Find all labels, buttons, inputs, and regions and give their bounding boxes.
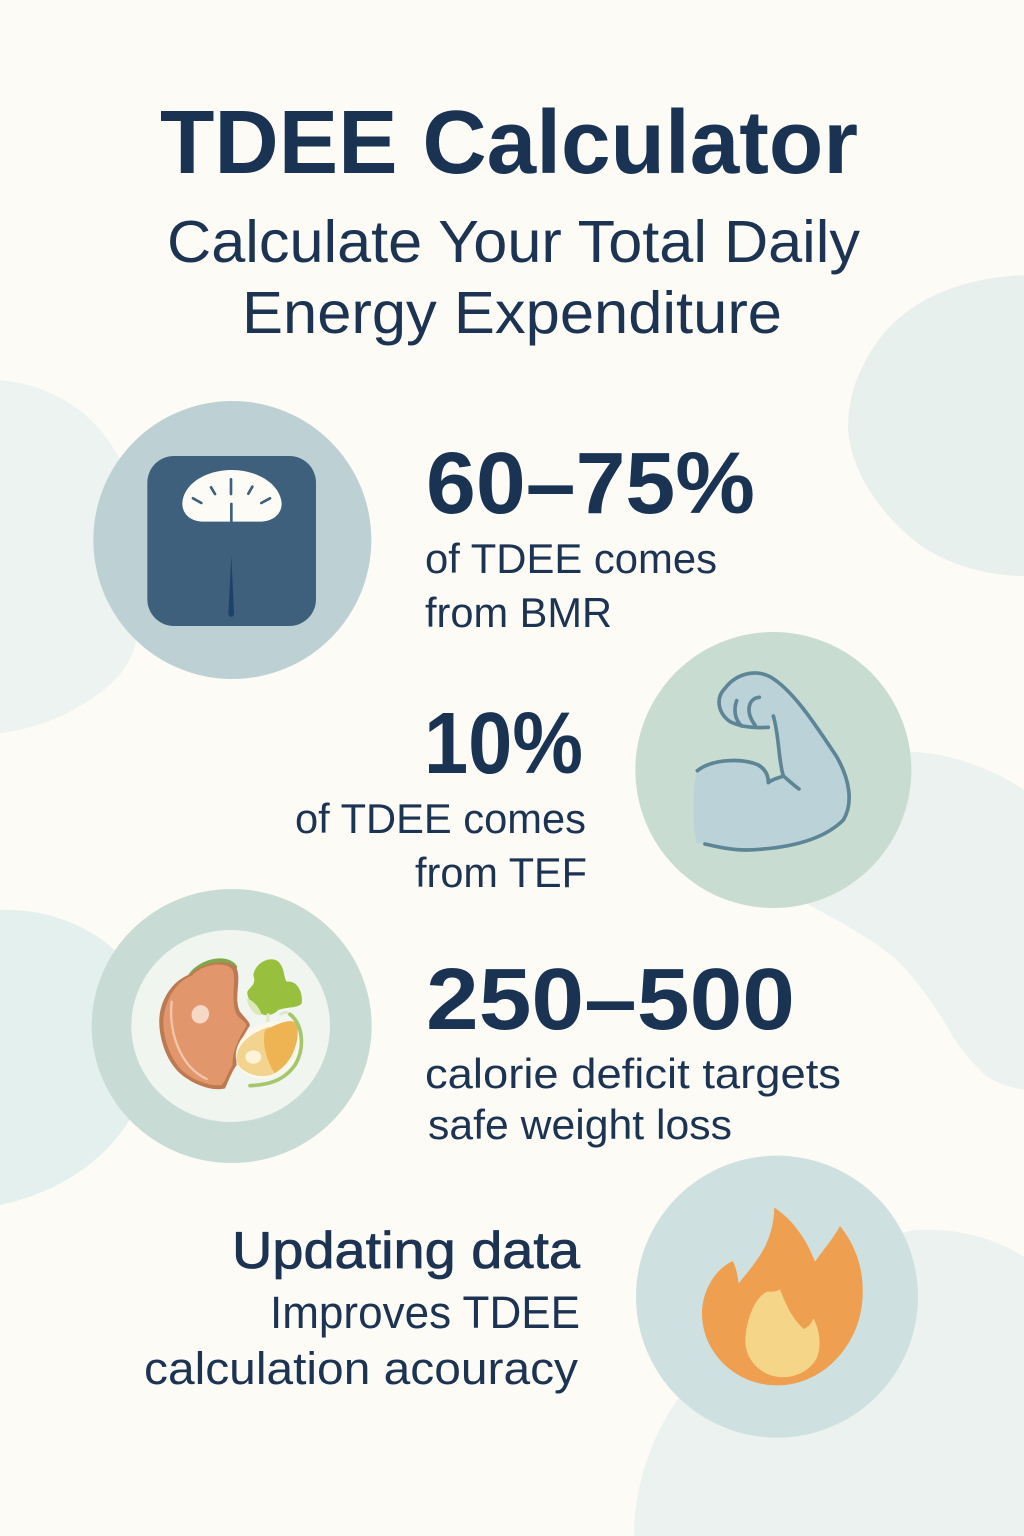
stat: 60-75% of TDEE from BMR: of TDEE comes — [425, 535, 717, 582]
stat: 250-500 calorie deficit — [425, 951, 841, 1148]
subtitle: Energy Expenditure — [242, 280, 782, 346]
subtitle — [167, 209, 861, 346]
stat: 60-75% of TDEE from BMR: 60–75% — [426, 435, 755, 532]
title: TDEE Calculator — [160, 93, 858, 193]
stat: 10% of TDEE from TEF: from TEF — [415, 849, 587, 896]
stat: 10% of TDEE from TEF: of TDEE comes — [295, 795, 586, 842]
stat: 60-75% of TDEE from BMR — [425, 435, 755, 636]
stat: 10% of TDEE from TEF — [295, 695, 587, 896]
icon: bathroom scale — [93, 401, 371, 679]
icon: flame — [636, 1156, 918, 1438]
stat: updating data improves accuracy: calculation acouracy — [144, 1343, 579, 1394]
subtitle: Calculate Your Total Daily — [167, 209, 861, 275]
stat: updating data improves accuracy: Improves TDEE — [270, 1287, 580, 1338]
stat: updating data improves accuracy: Updating data — [232, 1222, 580, 1280]
stat: updating data improves accuracy — [144, 1222, 580, 1394]
icon: flexed arm — [635, 632, 911, 908]
stat: 250-500 calorie deficit: 250–500 — [426, 951, 795, 1048]
stat: 60-75% of TDEE from BMR: from BMR — [425, 589, 612, 636]
icon: plate of food — [92, 889, 372, 1163]
stat: 250-500 calorie deficit: calorie deficit targets — [425, 1050, 841, 1097]
stat: 250-500 calorie deficit: safe weight loss — [428, 1101, 732, 1148]
stat: 10% of TDEE from TEF: 10% — [424, 695, 583, 792]
